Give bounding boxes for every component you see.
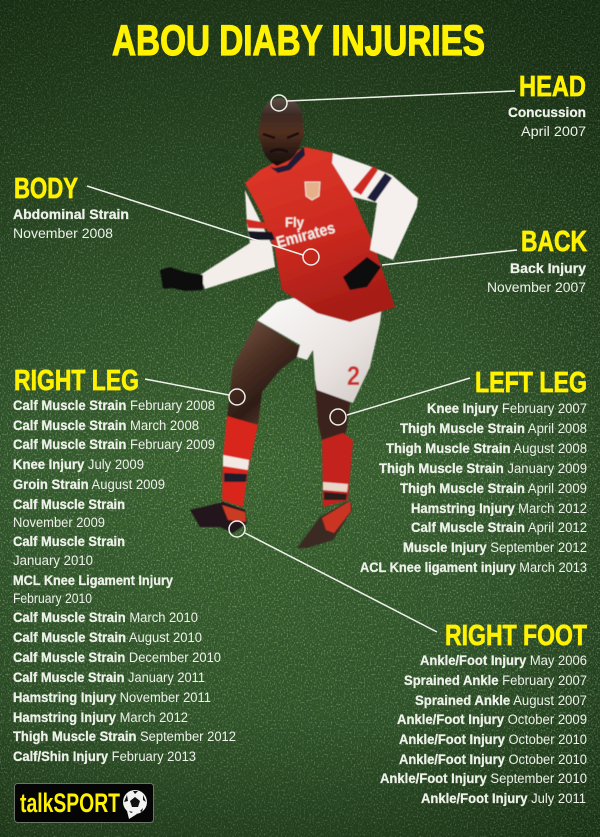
right sleeve (332, 153, 418, 260)
right leg section: Calf Muscle Strain August 2010 (13, 630, 202, 645)
body marker (87, 186, 319, 265)
jersey (245, 147, 395, 322)
shorts (257, 298, 382, 403)
left sock (322, 433, 353, 507)
back section: November 2007 (487, 280, 586, 295)
right leg section: Calf Muscle Strain March 2008 (13, 418, 199, 433)
talkSPORT logo: talkSPORT (20, 788, 120, 818)
right foot section: Ankle/Foot Injury May 2006 (420, 653, 587, 668)
left leg section: Thigh Muscle Strain January 2009 (379, 461, 587, 476)
left leg section: Muscle Injury September 2012 (403, 540, 587, 555)
head section (508, 71, 586, 139)
body section: November 2008 (13, 226, 113, 241)
right leg section: Calf Muscle Strain February 2008 (13, 398, 215, 413)
right leg section: Calf Muscle Strain March 2010 (13, 610, 198, 625)
right foot section: Ankle/Foot Injury July 2011 (421, 791, 586, 806)
left sleeve red band (246, 219, 270, 229)
right leg section: MCL Knee Ligament Injury (13, 573, 173, 588)
icon: football speech bubble (123, 790, 147, 819)
right leg section: January 2010 (13, 553, 93, 568)
left glove (160, 267, 203, 291)
club crest (305, 182, 320, 200)
right sock (222, 416, 258, 507)
head (258, 98, 304, 166)
left leg section: Calf Muscle Strain April 2012 (411, 520, 587, 535)
left leg section: Knee Injury February 2007 (427, 401, 587, 416)
left leg marker (330, 378, 470, 425)
left leg section: Thigh Muscle Strain August 2008 (386, 441, 587, 456)
right foot section (380, 620, 587, 806)
left leg (315, 385, 350, 445)
right leg section: November 2009 (13, 515, 105, 530)
back section: Back Injury (510, 261, 587, 276)
title: ABOU DIABY INJURIES (112, 17, 485, 65)
right boot (190, 502, 247, 533)
right leg section: Calf Muscle Strain December 2010 (13, 650, 221, 665)
right leg section: Thigh Muscle Strain September 2012 (13, 729, 236, 744)
right foot section: Ankle/Foot Injury October 2010 (399, 732, 587, 747)
collar (270, 147, 305, 173)
callout lines and markers (87, 91, 517, 632)
body section (13, 173, 129, 241)
right foot section: Ankle/Foot Injury October 2010 (399, 752, 587, 767)
right foot section: Ankle/Foot Injury October 2009 (397, 712, 587, 727)
left leg section: Thigh Muscle Strain April 2008 (400, 421, 587, 436)
sleeve red band (353, 166, 378, 195)
right leg section: Hamstring Injury March 2012 (13, 710, 188, 725)
left boot (297, 500, 352, 548)
right leg section: Calf Muscle Strain January 2011 (13, 670, 205, 685)
left leg section (360, 367, 587, 575)
right leg section: RIGHT LEG (14, 365, 139, 397)
right leg section: Hamstring Injury November 2011 (13, 690, 211, 705)
shorts number: 2 (347, 361, 360, 391)
right leg section: February 2010 (13, 591, 92, 606)
jersey sponsor: Emirates (275, 220, 337, 252)
head marker (271, 91, 515, 111)
right leg marker (145, 379, 245, 405)
left leg section: ACL Knee ligament injury March 2013 (360, 560, 587, 575)
right leg section (13, 365, 236, 764)
right leg section: Calf/Shin Injury February 2013 (13, 749, 196, 764)
left leg section: Thigh Muscle Strain April 2009 (400, 481, 587, 496)
right glove (343, 257, 381, 290)
head section: Concussion (508, 105, 586, 120)
left arm sleeve (200, 190, 275, 289)
right leg section: Knee Injury July 2009 (13, 457, 144, 472)
right leg section: Calf Muscle Strain February 2009 (13, 437, 215, 452)
left sleeve navy band (248, 231, 275, 240)
head section: HEAD (519, 71, 586, 103)
body section: Abdominal Strain (13, 207, 129, 222)
right leg section: Calf Muscle Strain (13, 497, 125, 512)
right leg (227, 320, 300, 425)
right foot section: Sprained Ankle February 2007 (404, 673, 587, 688)
right foot section: Sprained Ankle August 2007 (415, 693, 587, 708)
player figure (160, 98, 418, 548)
right foot section: Ankle/Foot Injury September 2010 (380, 771, 587, 786)
left leg section: Hamstring Injury March 2012 (411, 501, 587, 516)
right leg section: Calf Muscle Strain (13, 534, 125, 549)
back marker (382, 250, 517, 265)
back section (487, 226, 587, 295)
body section: BODY (14, 173, 78, 205)
head section: April 2007 (521, 124, 586, 139)
right foot marker (229, 521, 437, 632)
jersey sponsor: Fly (285, 214, 304, 230)
right leg section: Groin Strain August 2009 (13, 477, 165, 492)
face details (263, 133, 299, 152)
sleeve navy band (367, 173, 392, 202)
